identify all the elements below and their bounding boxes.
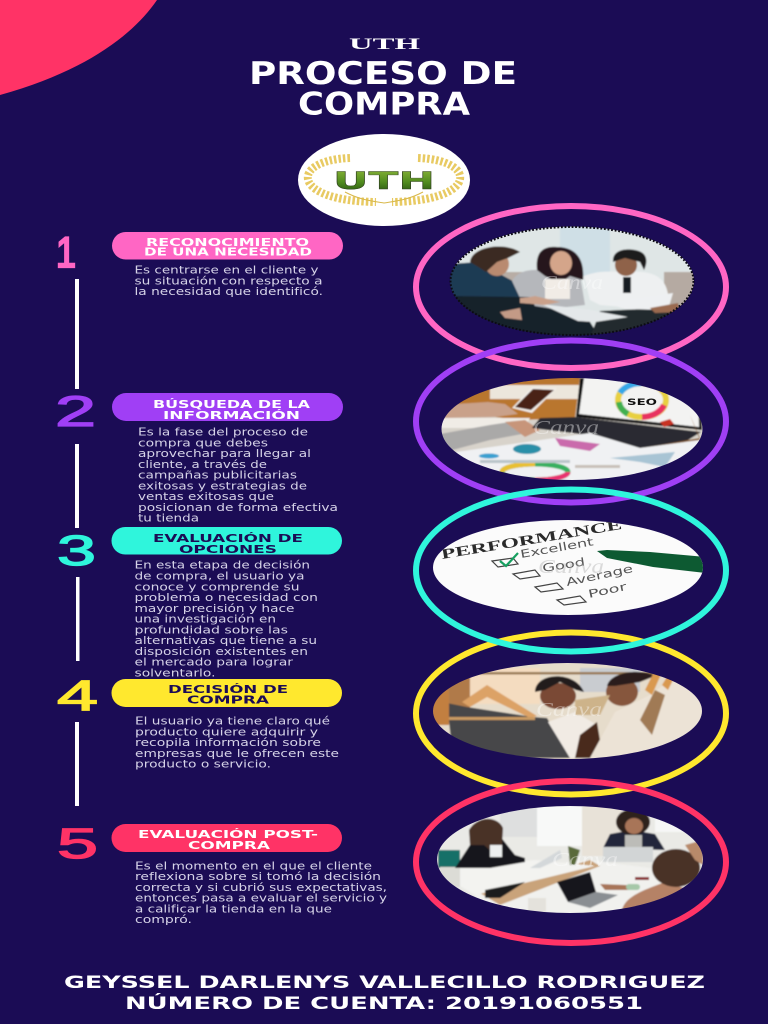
heading pill 1: [112, 232, 343, 260]
body text 4: recopila información sobre: [135, 737, 321, 749]
heading pill 5: EVALUACIÓN POST-: [138, 828, 318, 841]
step 4: [57, 672, 342, 771]
number 3: 3: [57, 527, 96, 575]
body text 2: cliente, a través de: [138, 459, 267, 471]
body text 5: compró.: [135, 914, 192, 926]
body text 3: mayor precisión y hace: [134, 603, 294, 615]
logo: UTH: UTH: [333, 167, 435, 195]
footer author text: GEYSSEL DARLENYS VALLECILLO RODRIGUEZ: [64, 973, 705, 992]
body text 3: el mercado para lograr: [134, 656, 294, 668]
heading pill 1: DE UNA NECESIDAD: [144, 248, 312, 258]
body text 2: exitosas y estrategias de: [138, 480, 307, 492]
heading pill 3: EVALUACIÓN DE: [153, 532, 303, 545]
body text 2: [138, 427, 338, 524]
heading pill 1: RECONOCIMIENTO: [146, 238, 310, 249]
timeline connector lines: [75, 279, 80, 806]
heading pill 4: [112, 679, 342, 707]
body text 4: [135, 716, 339, 771]
ring 2 purple: [416, 340, 726, 502]
body text 3: [134, 560, 318, 679]
body text 3: una investigación en: [134, 614, 276, 626]
body text 5: a calificar la tienda en la que: [135, 903, 332, 915]
photo 1: business team: Canva: [541, 272, 603, 294]
body text 3: En esta etapa de decisión: [134, 560, 310, 572]
body text 3: de compra, el usuario ya: [134, 570, 304, 582]
photo 3: performance checklist: Average: [565, 562, 634, 589]
body text 4: producto o servicio.: [135, 759, 271, 771]
logo: UTH: [298, 134, 470, 226]
footer author text: [64, 973, 705, 1013]
body text 2: ventas exitosas que: [138, 491, 274, 503]
body text 1: [134, 264, 323, 298]
heading pill 5: COMPRA: [188, 841, 270, 852]
body text 3: disposición existentes en: [134, 646, 308, 658]
body text 3: solventarlo.: [134, 667, 216, 679]
header title: [249, 36, 517, 122]
body text 2: compra que debes: [138, 437, 268, 449]
header title: COMPRA: [298, 86, 470, 122]
number 1: 1: [56, 229, 76, 277]
step 2: [55, 388, 343, 524]
photo 3: performance checklist: Canva: [538, 556, 604, 578]
heading pill 3: [112, 527, 342, 556]
photo 3: performance checklist: Good: [541, 555, 586, 575]
body text 2: Es la fase del proceso de: [138, 427, 308, 439]
body text 3: problema o necesidad con: [134, 592, 318, 604]
body text 2: campañas publicitarias: [138, 470, 297, 482]
body text 4: El usuario ya tiene claro qué: [135, 716, 330, 728]
photo 2: SEO desk: Canva: [533, 417, 599, 439]
photo 4: clothes shopping: Canva: [536, 699, 602, 721]
heading pill 4: DECISIÓN DE: [168, 683, 288, 696]
photo 1: business team: [450, 226, 700, 338]
header title: UTH: [349, 36, 421, 53]
ring 4 yellow: [416, 632, 726, 794]
body text 5: reflexiona sobre si tomó la decisión: [135, 871, 381, 883]
photo 2: SEO desk: [440, 376, 706, 484]
body text 2: posicionan de forma efectiva: [138, 502, 338, 514]
body text 5: Es el momento en el que el cliente: [135, 860, 372, 872]
body text 3: alternativas que tiene a su: [134, 635, 317, 647]
photo 3: performance checklist: Excellent: [519, 535, 595, 561]
step 3: [57, 527, 342, 679]
ring 1 pink: [416, 206, 726, 368]
body text 5: [135, 860, 387, 926]
photo 2: SEO desk: SEO: [627, 398, 658, 408]
ring 3 teal: [416, 490, 726, 652]
header title: PROCESO DE: [249, 56, 517, 92]
body text 5: correcta y si cubrió sus expectativas,: [135, 882, 387, 894]
body text 1: su situación con respecto a: [134, 275, 322, 287]
body text 3: profundidad sobre las: [134, 624, 288, 636]
heading pill 2: INFORMACIÓN: [163, 409, 300, 422]
body text 4: empresas que le ofrecen este: [135, 748, 339, 760]
number 5: 5: [57, 820, 98, 868]
photo 3: performance checklist: [430, 518, 706, 618]
number 4: 4: [57, 672, 98, 720]
decorative coral corner shape: [0, 0, 157, 95]
number 2: 2: [55, 388, 96, 436]
photo 5: team meeting: Canva: [552, 849, 618, 871]
heading pill 2: BÚSQUEDA DE LA: [153, 398, 310, 411]
body text 1: la necesidad que identificó.: [134, 286, 323, 298]
ring 5 coral: [416, 781, 726, 943]
body text 2: aprovechar para llegar al: [138, 448, 311, 460]
body text 4: producto quiere adquirir y: [135, 726, 318, 738]
photo 5: team meeting: [434, 804, 706, 916]
body text 5: entonces pasa a evaluar el servicio y: [135, 892, 387, 904]
step 5: [57, 820, 387, 926]
heading pill 2: [112, 393, 343, 422]
heading pill 4: COMPRA: [187, 696, 269, 706]
heading pill 3: OPCIONES: [179, 545, 277, 556]
body text 3: conoce y comprende su: [134, 581, 300, 593]
body text 1: Es centrarse en el cliente y: [134, 264, 318, 276]
photo 3: performance checklist: Poor: [587, 580, 629, 601]
body text 2: tu tienda: [138, 512, 199, 524]
photo 4: clothes shopping: [430, 660, 706, 762]
footer author text: NÚMERO DE CUENTA: 20191060551: [125, 994, 643, 1013]
photo 3: performance checklist: PERFORMANCE: [440, 518, 623, 563]
step 1: [56, 229, 343, 298]
heading pill 5: [112, 824, 342, 852]
